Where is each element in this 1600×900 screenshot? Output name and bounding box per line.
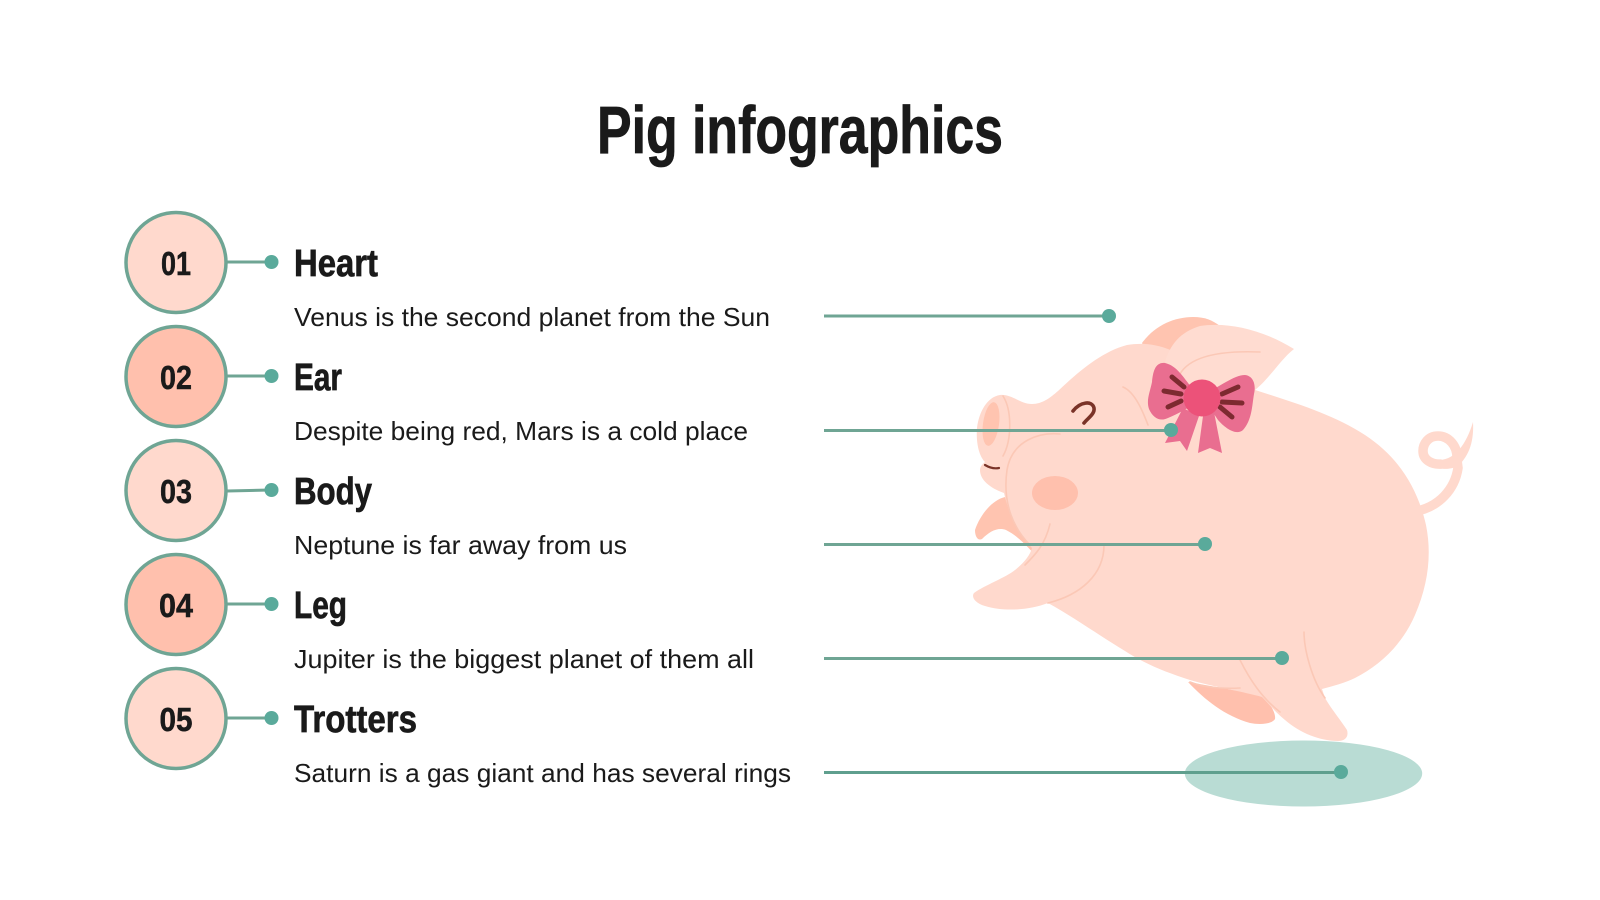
description: Ear: Despite being red, Mars is a cold place [294, 416, 748, 446]
bow ribbon left [1165, 408, 1199, 451]
heading: Trotters: Trotters [294, 699, 417, 741]
heading: Body: Body [294, 471, 372, 513]
bow ribbon right [1198, 412, 1222, 453]
bow [1148, 363, 1255, 453]
pig body and head [973, 344, 1429, 741]
bow knot [1184, 380, 1220, 416]
pointer: leg [824, 651, 1289, 665]
far front leg [975, 497, 1040, 560]
nostril [980, 401, 1002, 447]
number badge 04: 04 [159, 587, 194, 624]
number badge 01: 01 [161, 245, 191, 282]
number badge 02 [126, 326, 226, 426]
number badge 01 [126, 212, 226, 312]
cheek [1032, 476, 1078, 510]
back ear [1142, 317, 1220, 380]
title: Pig infographics [597, 93, 1003, 168]
ground shadow [1185, 740, 1422, 806]
connector lines to pig [824, 309, 1348, 779]
pointer: body [824, 537, 1212, 551]
bow wing right [1206, 375, 1255, 432]
back leg [1188, 682, 1275, 724]
connector 01 [227, 255, 278, 269]
description: Leg: Jupiter is the biggest planet of them all [294, 644, 754, 674]
description: Trotters: Saturn is a gas giant and has several rings [294, 758, 791, 788]
number badge 04 [126, 554, 226, 654]
pig illustration [973, 317, 1473, 806]
item 02 [126, 326, 748, 446]
heading: Ear: Ear [294, 357, 342, 399]
connector 04 [227, 597, 278, 611]
body contour lines [1003, 352, 1325, 712]
item 04 [126, 554, 754, 674]
heading: Leg: Leg [294, 585, 347, 627]
number badge 02: 02 [160, 359, 192, 396]
item 03 [126, 440, 627, 560]
number badge 03 [126, 440, 226, 540]
pointer: trotters [824, 765, 1348, 779]
connector 02 [227, 369, 278, 383]
connector 03 [227, 483, 278, 497]
item 05 [126, 668, 791, 788]
item 01 [126, 212, 770, 332]
mouth [985, 465, 999, 468]
pointer: heart [824, 309, 1116, 323]
tail [1412, 422, 1473, 512]
heading: Heart: Heart [294, 243, 378, 285]
number badge 03: 03 [160, 473, 192, 510]
number badge 05: 05 [160, 701, 192, 738]
description: Heart: Venus is the second planet from the Sun [294, 302, 770, 332]
description: Body: Neptune is far away from us [294, 530, 627, 560]
pointer: ear [824, 423, 1178, 437]
front ear [1165, 325, 1294, 395]
bow folds [1164, 377, 1242, 417]
number badge 05 [126, 668, 226, 768]
eye [1073, 403, 1094, 423]
bow wing left [1148, 363, 1197, 420]
connector 05 [227, 711, 278, 725]
